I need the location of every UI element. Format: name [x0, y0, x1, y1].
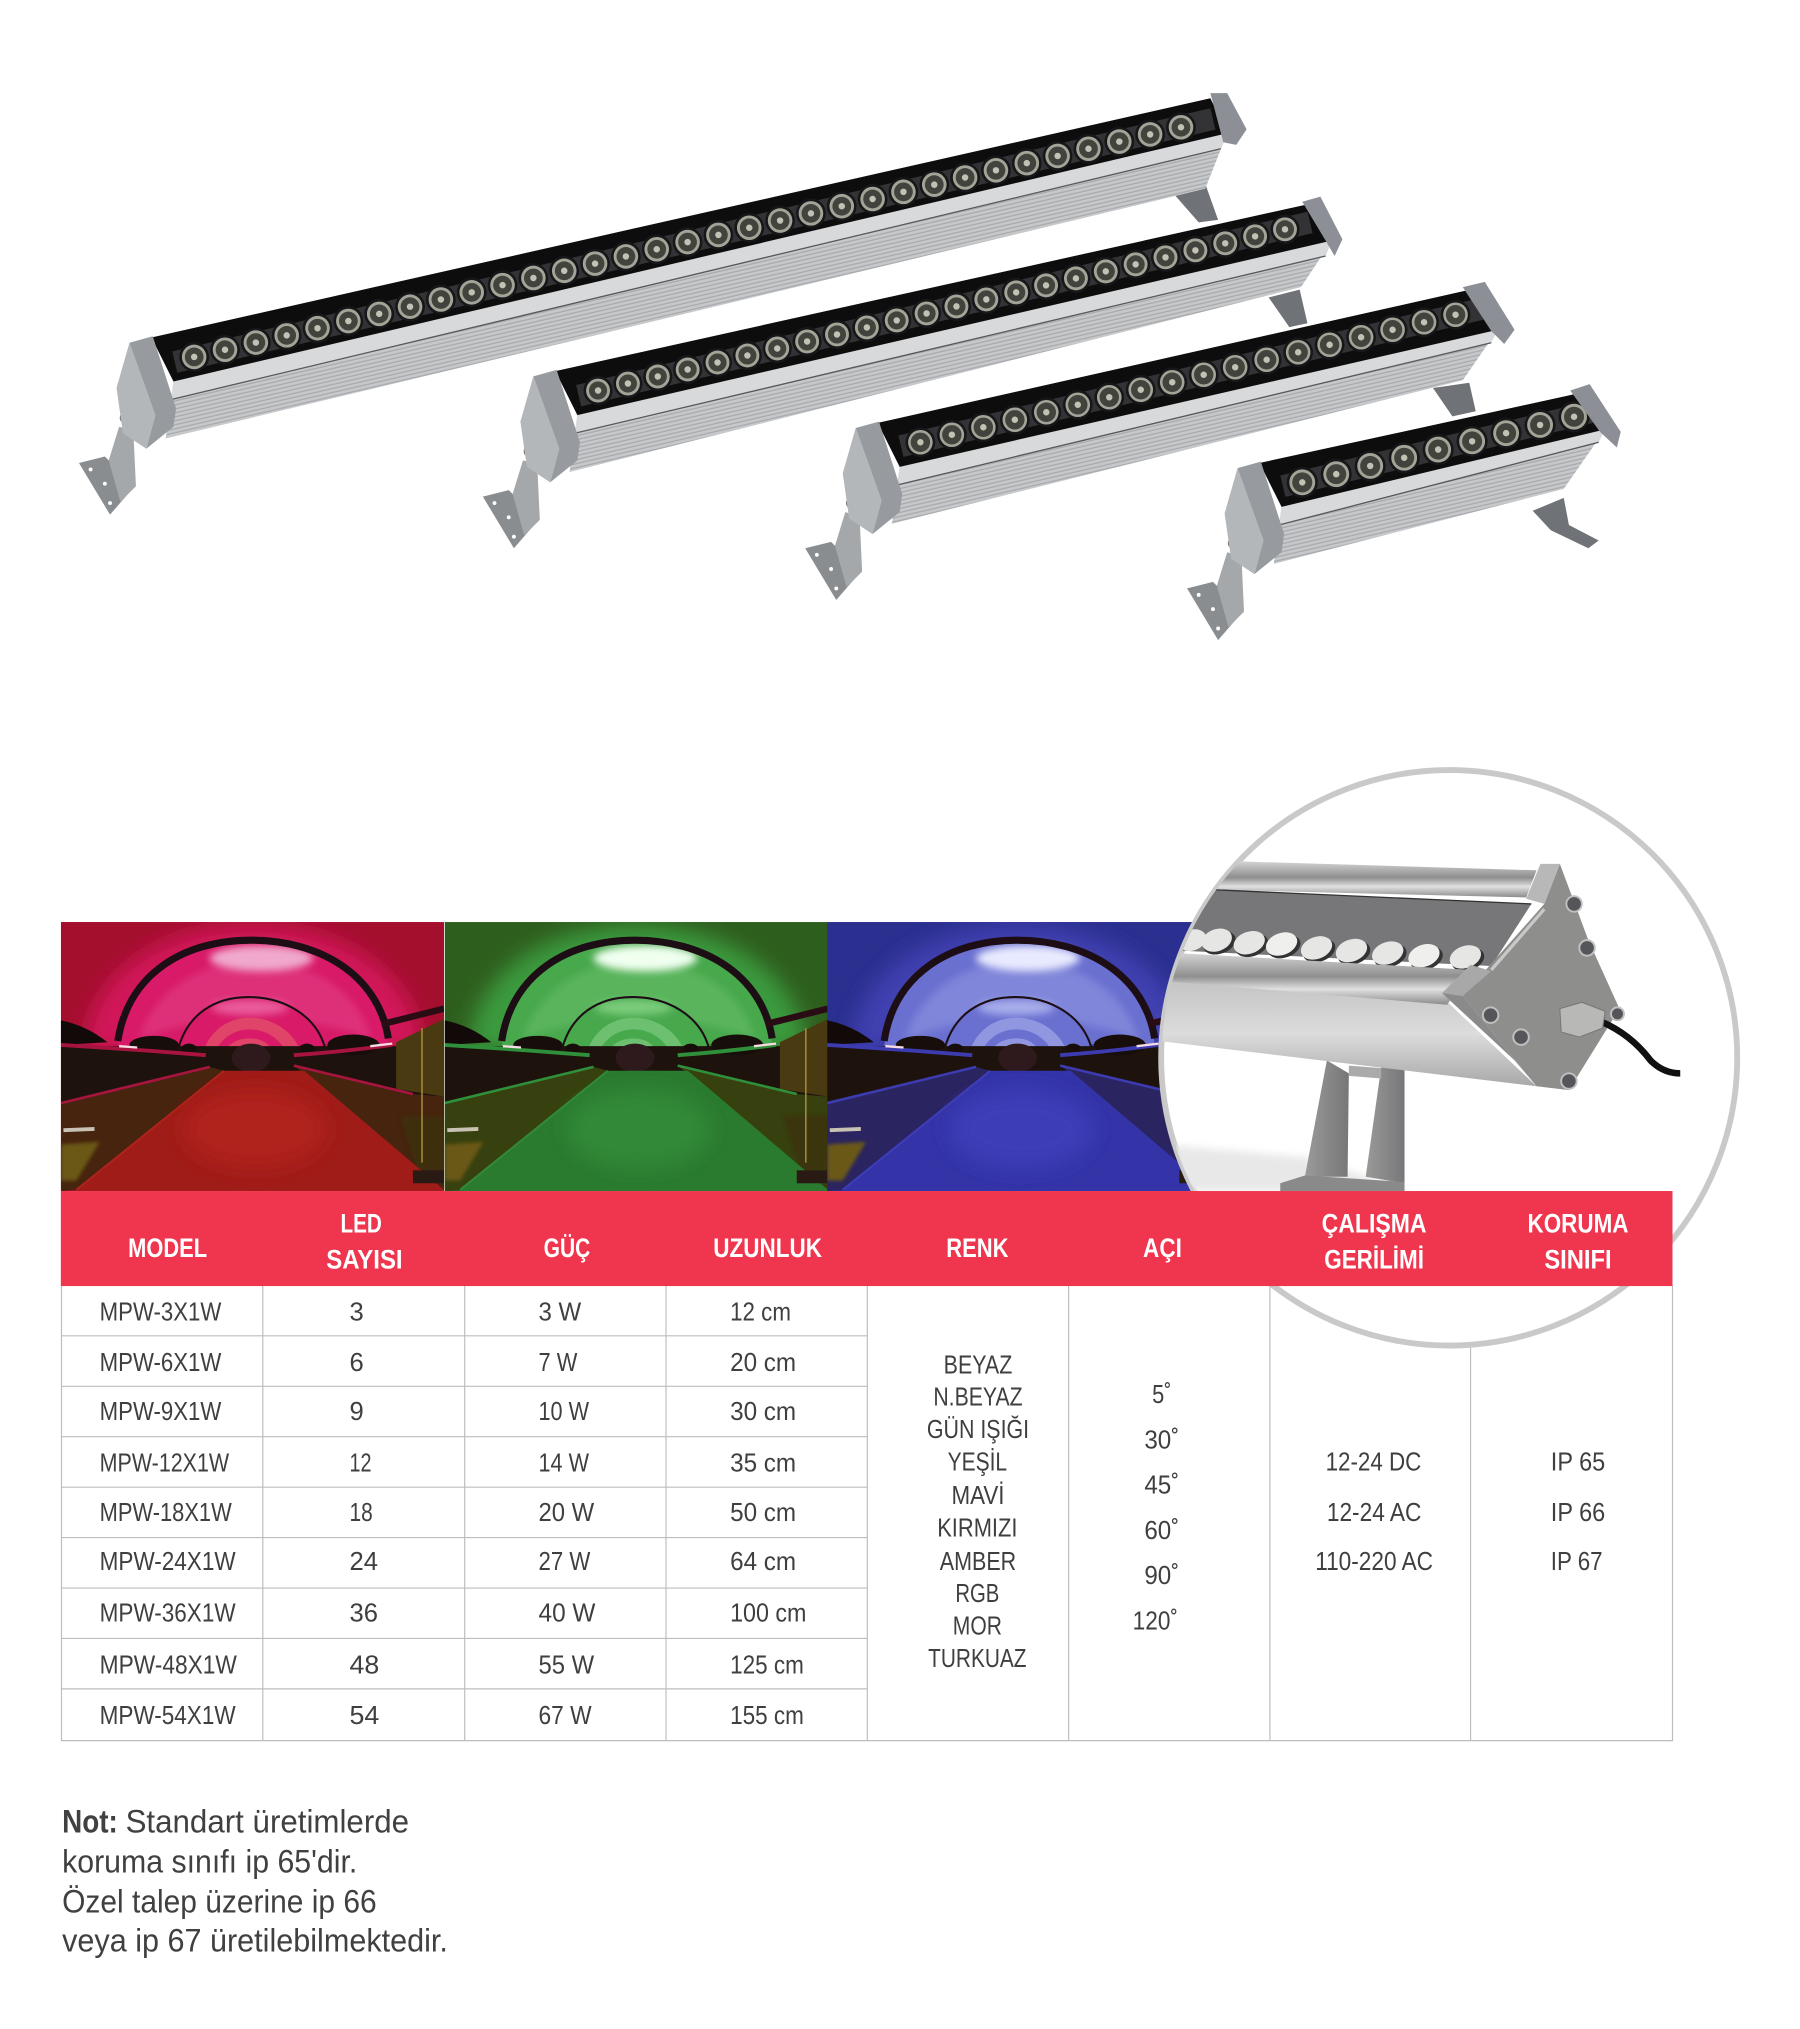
note text: koruma sınıfı ip 65'dir. — [62, 1844, 357, 1880]
table row: MPW-18X1W: 20 W — [539, 1499, 594, 1527]
header: AÇI: AÇI — [1143, 1233, 1182, 1263]
merged cell: colours list: MAVİ — [951, 1481, 1005, 1510]
table row: MPW-12X1W: 12 — [350, 1450, 372, 1478]
table row: MPW-54X1W: 54 — [350, 1702, 379, 1730]
merged cell: beam angles — [1133, 1381, 1179, 1635]
table row: MPW-9X1W: 9 — [350, 1398, 364, 1426]
note text — [62, 1803, 448, 1958]
table row: MPW-54X1W — [100, 1702, 804, 1730]
table row: MPW-9X1W — [100, 1398, 796, 1426]
header: KORUMA SINIFI: SINIFI — [1544, 1245, 1612, 1275]
fixture: longest MPW bar — [79, 93, 1247, 515]
table row: MPW-48X1W: 125 cm — [730, 1651, 804, 1679]
table row: MPW-6X1W: MPW-6X1W — [100, 1349, 221, 1377]
merged cell: colours list: BEYAZ — [944, 1351, 1012, 1379]
table row: MPW-18X1W — [100, 1499, 796, 1527]
merged cell: colours list: RGB — [955, 1580, 999, 1608]
merged cell: protection class — [1551, 1448, 1605, 1576]
merged cell: beam angles: 90˚ — [1144, 1562, 1179, 1590]
merged cell: protection class: IP 65 — [1551, 1448, 1605, 1476]
header: KORUMA SINIFI — [1528, 1208, 1628, 1275]
merged cell: operating voltage: 12-24 AC — [1327, 1499, 1421, 1527]
merged cell: colours list: AMBER — [940, 1548, 1016, 1576]
table row: MPW-3X1W: 12 cm — [730, 1298, 791, 1326]
table row: MPW-24X1W: MPW-24X1W — [100, 1548, 236, 1576]
merged cell: colours list: N.BEYAZ — [933, 1384, 1023, 1412]
header: UZUNLUK: UZUNLUK — [713, 1233, 822, 1263]
table row: MPW-9X1W: MPW-9X1W — [100, 1398, 221, 1426]
table row: MPW-18X1W: MPW-18X1W — [100, 1499, 232, 1527]
table row: MPW-3X1W: MPW-3X1W — [100, 1298, 221, 1326]
table row: MPW-9X1W: 30 cm — [730, 1398, 796, 1426]
photo: green lit tunnel — [445, 922, 828, 1191]
detail circle with fixture close-up — [1159, 770, 1737, 1346]
table row: MPW-6X1W: 6 — [350, 1349, 364, 1377]
merged cell: beam angles: 30˚ — [1144, 1426, 1179, 1454]
merged cell: colours list: MOR — [953, 1613, 1002, 1641]
table row: MPW-36X1W: 36 — [350, 1600, 378, 1628]
table row: MPW-3X1W: 3 W — [539, 1298, 581, 1326]
table row: MPW-24X1W: 27 W — [539, 1548, 590, 1576]
table row: MPW-24X1W — [100, 1548, 796, 1576]
fixture: second MPW bar — [483, 197, 1342, 548]
table grid lines — [61, 1285, 1672, 1741]
table row: MPW-6X1W: 7 W — [539, 1349, 577, 1377]
table row: MPW-12X1W: 35 cm — [730, 1450, 796, 1478]
merged cell: protection class: IP 67 — [1551, 1548, 1603, 1576]
table header band — [61, 1191, 1672, 1286]
table row: MPW-6X1W — [100, 1349, 796, 1377]
merged cell: colours list: KIRMIZI — [937, 1514, 1017, 1542]
table row: MPW-36X1W: 40 W — [539, 1600, 595, 1628]
table row: MPW-24X1W: 24 — [350, 1548, 378, 1576]
table row: MPW-54X1W: MPW-54X1W — [100, 1702, 236, 1730]
merged cell: colours list — [927, 1351, 1029, 1673]
table row: MPW-48X1W: 55 W — [539, 1651, 594, 1679]
table row: MPW-48X1W — [100, 1651, 804, 1679]
table row: MPW-36X1W: MPW-36X1W — [100, 1600, 236, 1628]
fixture: third MPW bar — [805, 282, 1515, 600]
table row: MPW-54X1W: 67 W — [539, 1702, 592, 1730]
header: LED SAYISI: SAYISI — [326, 1245, 403, 1275]
fixture: shortest MPW bar — [1187, 384, 1621, 640]
note text: veya ip 67 üretilebilmektedir. — [62, 1922, 448, 1958]
header: MODEL: MODEL — [128, 1233, 207, 1263]
table row: MPW-12X1W: MPW-12X1W — [100, 1450, 229, 1478]
photo: red lit tunnel — [61, 922, 444, 1191]
table row: MPW-36X1W — [100, 1600, 806, 1628]
header: ÇALIŞMA GERİLİMİ: GERİLİMİ — [1324, 1245, 1424, 1275]
header: ÇALIŞMA GERİLİMİ: ÇALIŞMA — [1322, 1208, 1427, 1238]
merged cell: beam angles: 5˚ — [1152, 1381, 1172, 1409]
table row: MPW-48X1W: 48 — [350, 1651, 379, 1679]
table row: MPW-12X1W — [100, 1450, 796, 1478]
table row: MPW-54X1W: 155 cm — [730, 1702, 804, 1730]
merged cell: beam angles: 60˚ — [1144, 1517, 1179, 1545]
table row: MPW-3X1W: 3 — [350, 1298, 364, 1326]
merged cell: operating voltage — [1315, 1448, 1433, 1576]
photo: blue lit tunnel — [827, 922, 1210, 1191]
merged cell: colours list: TURKUAZ — [928, 1645, 1027, 1673]
merged cell: operating voltage: 12-24 DC — [1326, 1448, 1421, 1476]
note text: Özel talep üzerine ip 66 — [62, 1884, 377, 1920]
table row: MPW-9X1W: 10 W — [539, 1398, 589, 1426]
table row: MPW-36X1W: 100 cm — [730, 1600, 806, 1628]
table row: MPW-48X1W: MPW-48X1W — [100, 1651, 237, 1679]
header: LED SAYISI — [326, 1208, 403, 1275]
merged cell: colours list: GÜN IŞIĞI — [927, 1415, 1029, 1444]
merged cell: operating voltage: 110-220 AC — [1315, 1548, 1433, 1576]
table row: MPW-6X1W: 20 cm — [730, 1349, 796, 1377]
header: GÜÇ: GÜÇ — [544, 1233, 590, 1263]
table row: MPW-18X1W: 50 cm — [730, 1499, 796, 1527]
table row: MPW-12X1W: 14 W — [539, 1450, 589, 1478]
merged cell: protection class: IP 66 — [1551, 1499, 1605, 1527]
header: ÇALIŞMA GERİLİMİ — [1322, 1208, 1427, 1275]
table row: MPW-24X1W: 64 cm — [730, 1548, 796, 1576]
table row: MPW-18X1W: 18 — [350, 1499, 373, 1527]
header: RENK: RENK — [946, 1233, 1008, 1263]
note text: Not: — [62, 1803, 118, 1839]
header: LED SAYISI: LED — [340, 1208, 382, 1238]
merged cell: colours list: YEŞİL — [948, 1447, 1007, 1476]
note text: Standart üretimlerde — [126, 1803, 409, 1839]
merged cell: beam angles: 120˚ — [1133, 1607, 1178, 1635]
header: KORUMA SINIFI: KORUMA — [1528, 1208, 1628, 1238]
table row: MPW-3X1W — [100, 1298, 791, 1326]
merged cell: beam angles: 45˚ — [1144, 1472, 1179, 1500]
